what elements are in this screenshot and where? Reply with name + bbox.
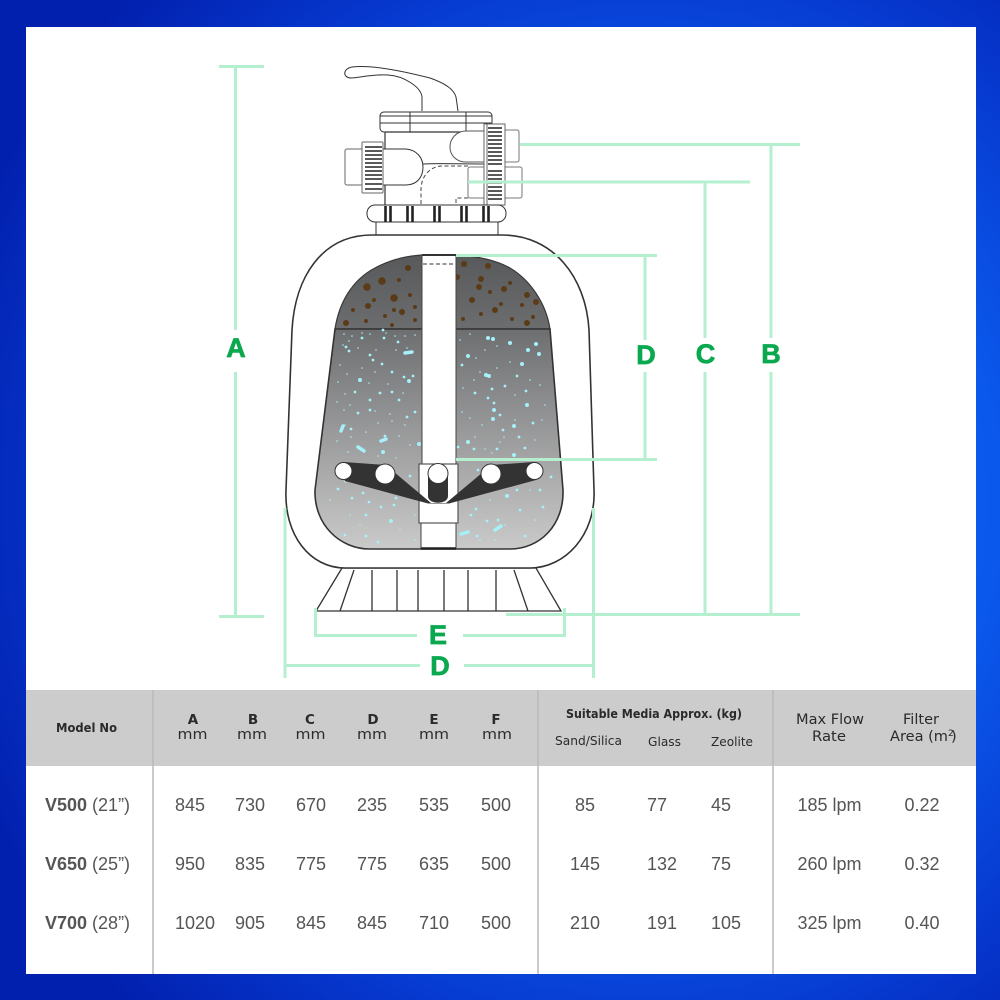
row V500: 45 (711, 795, 731, 815)
valve body (385, 132, 462, 206)
row V650: V650 (25”) (45, 854, 130, 874)
dimension E (316, 608, 564, 636)
table header text (56, 707, 957, 749)
row V500: 235 (357, 795, 387, 815)
dimension letter C: C (696, 339, 715, 369)
table header band (26, 690, 976, 766)
row V500: V500 (21”) (45, 795, 130, 815)
dimension letter E: E (429, 620, 447, 650)
media sub headers: Zeolite (711, 734, 753, 749)
row V700: 905 (235, 913, 265, 933)
dimension column headers (178, 712, 512, 743)
neck (376, 222, 498, 236)
row V650: 775 (357, 854, 387, 874)
valve cap (380, 112, 492, 132)
dimension column headers: mm (357, 727, 387, 743)
left pipe (345, 149, 423, 185)
media header: Suitable Media Approx. (kg) (566, 707, 742, 721)
lower support pipe (421, 520, 456, 549)
row V500: 845 (175, 795, 205, 815)
row V650 (45, 854, 940, 874)
row V500 (45, 795, 940, 815)
row V500: 500 (481, 795, 511, 815)
row V500: 0.22 (904, 795, 940, 815)
dimension letter D lower: D (430, 651, 450, 681)
row V500: 85 (575, 795, 595, 815)
dimension D bottom (285, 508, 594, 678)
row V700: 845 (296, 913, 326, 933)
row V500: 535 (419, 795, 449, 815)
row V700: 0.40 (904, 913, 940, 933)
brown zeolite granules (346, 264, 536, 325)
model header: Model No (56, 721, 117, 735)
row V650: 775 (296, 854, 326, 874)
filter area header: Filter (903, 712, 939, 728)
row V650: 145 (570, 854, 600, 874)
collar (367, 205, 506, 222)
row V650: 132 (647, 854, 677, 874)
row V700: 325 lpm (797, 913, 862, 933)
dimension column headers: mm (419, 727, 449, 743)
filter area header: Area (m (890, 729, 948, 745)
dimension D right (456, 255, 657, 460)
dimension letter D: D (636, 340, 656, 370)
dimension column headers: A (188, 712, 199, 728)
row V700: 191 (647, 913, 677, 933)
row V700 (45, 913, 940, 933)
media sub headers (555, 733, 753, 749)
row V500: 730 (235, 795, 265, 815)
row V650: 500 (481, 854, 511, 874)
filter area header: ) (951, 729, 957, 745)
row V700: V700 (28”) (45, 913, 130, 933)
dimension column headers: mm (178, 727, 208, 743)
upper right pipe (450, 130, 519, 162)
row V650: 950 (175, 854, 205, 874)
dimension column headers: C (305, 712, 315, 728)
row V700: 1020 (175, 913, 215, 933)
hidden internal pipe (421, 166, 468, 255)
filter diagram (286, 66, 594, 611)
filter area header (890, 712, 957, 745)
row V650: 635 (419, 854, 449, 874)
left union nut (362, 142, 383, 193)
row V700: 845 (357, 913, 387, 933)
blue sand granules (330, 330, 551, 542)
row V500: 185 lpm (797, 795, 862, 815)
zeolite media layer (335, 255, 550, 329)
media sub headers: Glass (648, 734, 681, 749)
dimension letter B: B (761, 339, 781, 369)
row V700: 710 (419, 913, 449, 933)
dimension column headers: mm (237, 727, 267, 743)
row V700: 210 (570, 913, 600, 933)
max flow header (796, 712, 864, 745)
dimension B (506, 144, 800, 614)
media sub headers: Sand/Silica (555, 733, 622, 748)
sand media layer (315, 329, 563, 549)
row V500: 670 (296, 795, 326, 815)
max flow header: Rate (812, 729, 846, 745)
row V700: 500 (481, 913, 511, 933)
dimension column headers: E (429, 712, 439, 728)
lateral arms (344, 462, 536, 504)
dimension C (468, 182, 750, 614)
row V700: 105 (711, 913, 741, 933)
dimension column headers: B (248, 712, 258, 728)
row V650: 0.32 (904, 854, 940, 874)
control valve (345, 66, 522, 255)
lower right pipe (468, 167, 522, 198)
dimension A (219, 66, 264, 616)
central standpipe (422, 255, 456, 465)
row V500: 77 (647, 795, 667, 815)
valve handle (345, 66, 458, 111)
table column dividers (153, 690, 773, 974)
row V650: 835 (235, 854, 265, 874)
dimension lines (219, 66, 800, 678)
dimension column headers: F (491, 712, 501, 728)
dimension column headers: D (367, 712, 379, 728)
tank shell (286, 235, 594, 568)
hub box (419, 464, 458, 523)
dimension column headers: mm (296, 727, 326, 743)
row V650: 75 (711, 854, 731, 874)
dimension column headers: mm (482, 727, 512, 743)
max flow header: Max Flow (796, 712, 864, 728)
dimension letter A: A (226, 333, 246, 363)
filter area header: 2 (948, 729, 954, 739)
row V650: 260 lpm (797, 854, 862, 874)
right union nut (484, 124, 505, 205)
tank feet (316, 568, 561, 611)
lateral openings (335, 462, 543, 484)
